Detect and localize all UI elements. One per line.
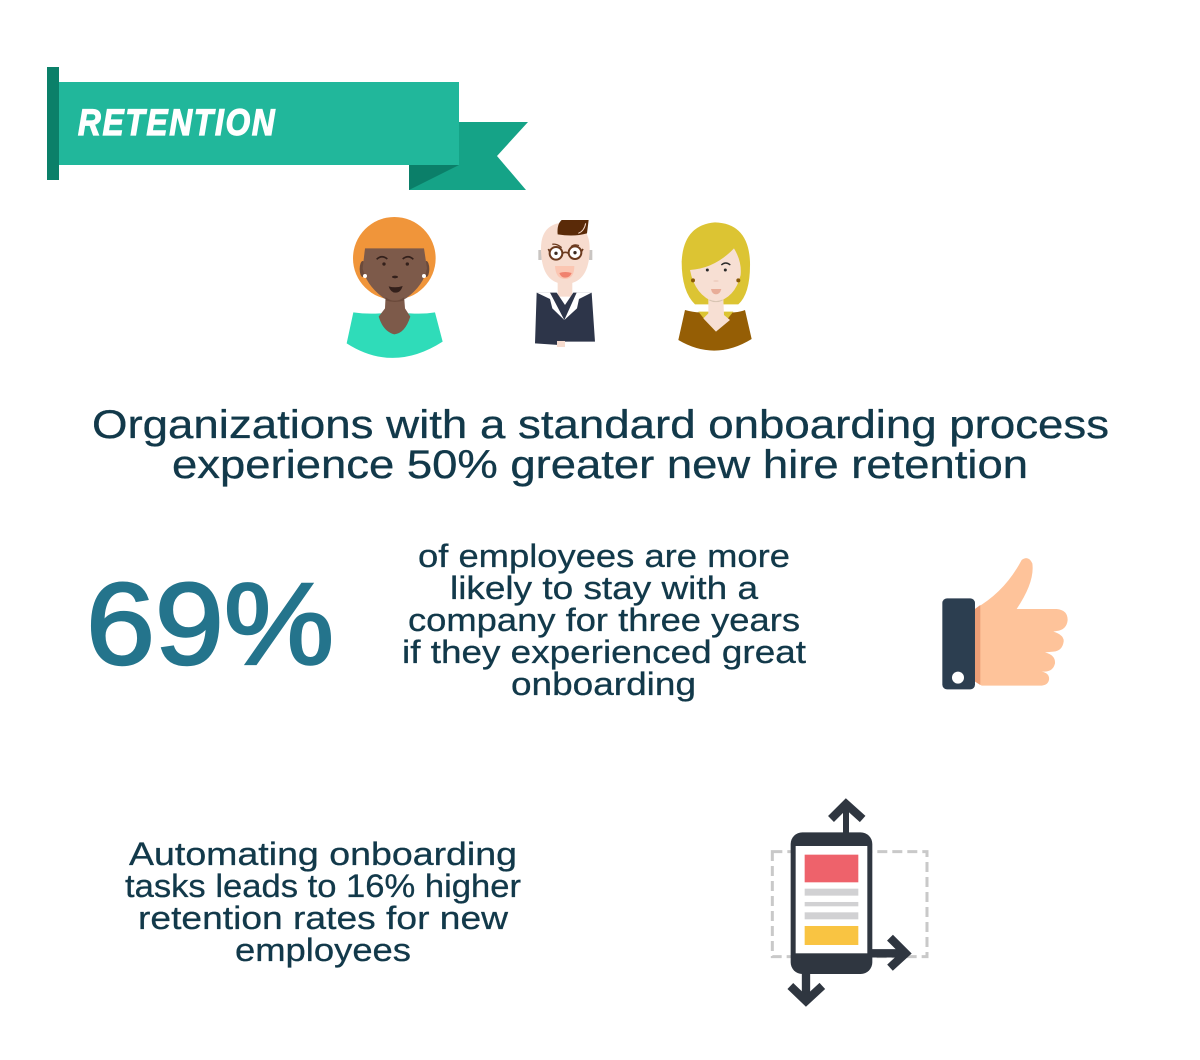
banner title: RETENTION bbox=[78, 103, 276, 144]
illustration: woman with blonde hair bbox=[678, 222, 752, 351]
statistic: 69%: 69% bbox=[86, 559, 334, 689]
text block: automating onboarding bbox=[125, 836, 521, 968]
text block: automating onboarding: employees bbox=[235, 932, 411, 968]
icon: responsive phone with arrows bbox=[772, 804, 927, 1002]
ribbon banner: retention bbox=[47, 67, 528, 190]
text block: automating onboarding: Automating onboarding bbox=[129, 836, 517, 872]
main heading bbox=[92, 403, 1109, 487]
text block: great onboarding: likely to stay with a bbox=[450, 570, 758, 606]
text block: automating onboarding: retention rates for new bbox=[138, 900, 509, 936]
ribbon post bbox=[47, 67, 59, 180]
ribbon tail bbox=[409, 122, 528, 190]
text block: automating onboarding: tasks leads to 16% higher bbox=[125, 868, 521, 904]
text block: great onboarding: of employees are more bbox=[418, 538, 790, 574]
text block: great onboarding bbox=[402, 538, 806, 702]
ribbon body bbox=[59, 82, 459, 165]
ribbon fold bbox=[409, 165, 459, 190]
text block: great onboarding: onboarding bbox=[511, 666, 696, 702]
illustration: man with glasses bbox=[535, 220, 595, 347]
text block: great onboarding: company for three years bbox=[408, 602, 800, 638]
illustration: woman with orange hair bbox=[347, 217, 443, 358]
heading line 2: experience 50% greater new hire retention bbox=[172, 443, 1028, 487]
text block: great onboarding: if they experienced great bbox=[402, 634, 806, 670]
icon: thumbs up bbox=[942, 558, 1068, 689]
heading line 1: Organizations with a standard onboarding process bbox=[92, 403, 1109, 447]
